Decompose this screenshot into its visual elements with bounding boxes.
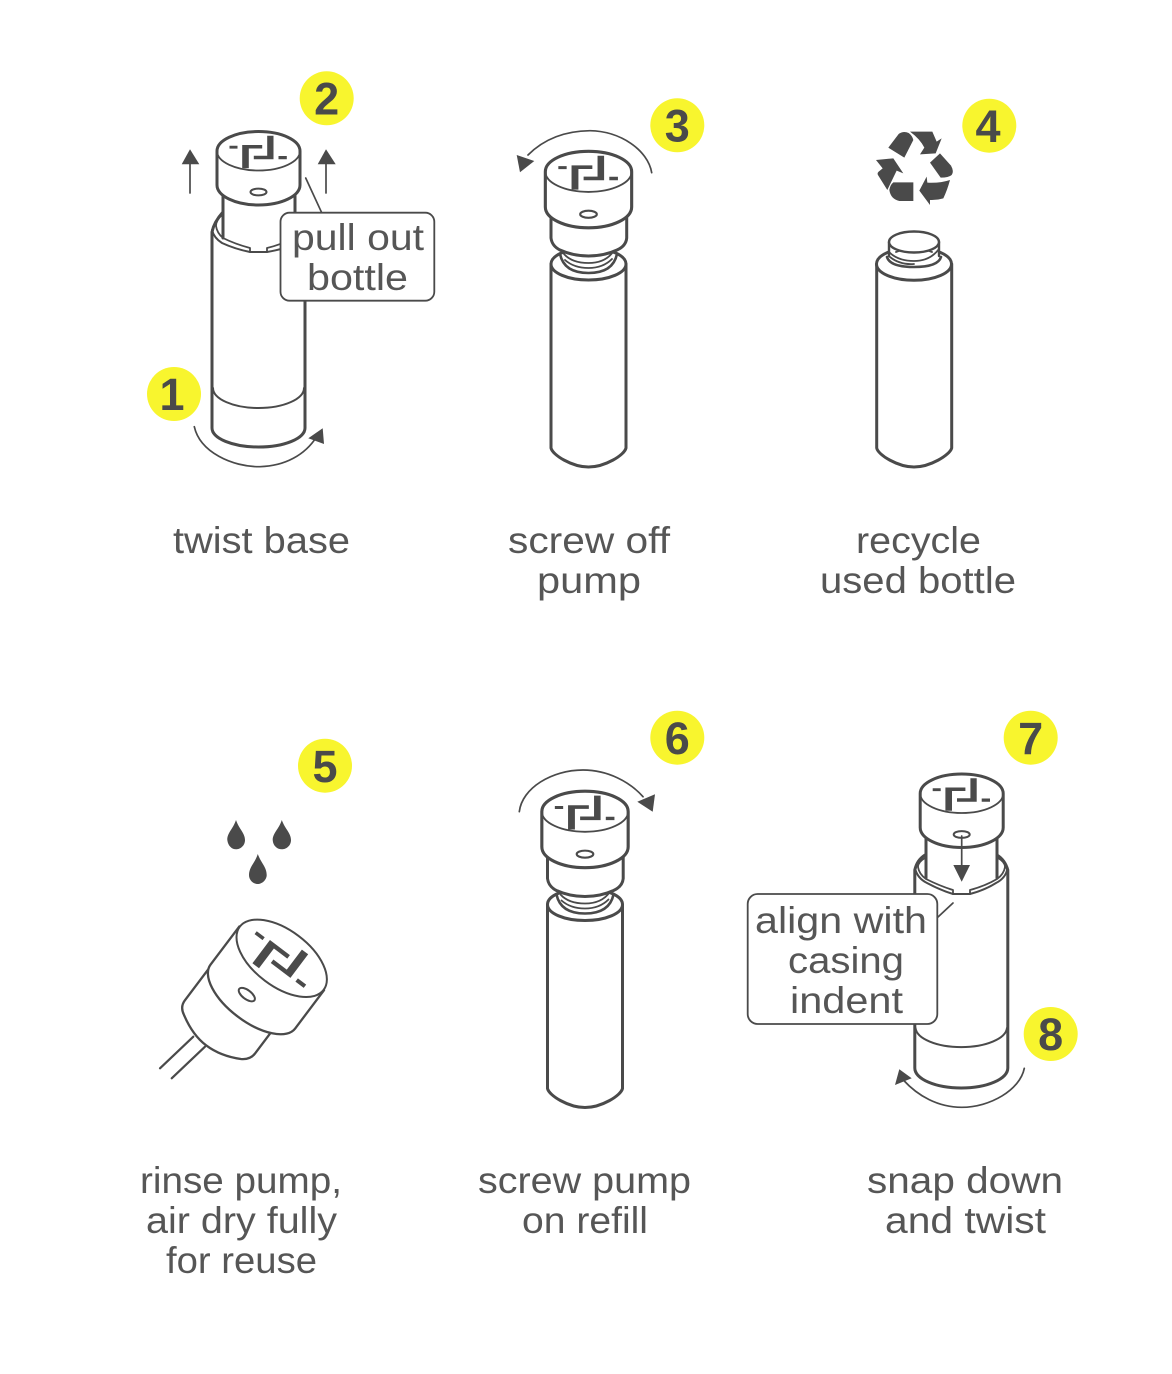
step 5 illustration: tilted pump xyxy=(160,904,341,1082)
caption: snap down and twist: snap down xyxy=(867,1160,1063,1201)
callout: pull out bottle: pull out xyxy=(292,217,425,258)
caption: screw pump on refill: on refill xyxy=(522,1200,648,1241)
icon: water drops xyxy=(227,820,291,884)
callout: align with casing indent: indent xyxy=(790,980,904,1021)
step 3 illustration: bottle with pump xyxy=(545,151,632,467)
step 6 illustration: pump on refill xyxy=(542,791,628,1108)
badge 5 xyxy=(298,739,352,793)
bottle and neck xyxy=(551,215,627,467)
casing body xyxy=(212,212,305,447)
caption: recycle used bottle: recycle xyxy=(856,520,981,561)
pump neck xyxy=(171,959,286,1072)
badge 2 xyxy=(300,71,354,125)
badge 7 xyxy=(1004,711,1058,765)
caption: recycle used bottle: used bottle xyxy=(820,560,1016,601)
arrow: push down xyxy=(961,836,963,868)
pump cap xyxy=(920,774,1003,847)
casing rim with notch xyxy=(216,215,294,252)
arrow: pull up left xyxy=(182,149,199,193)
casing body xyxy=(915,855,1008,1088)
arrow: screw on xyxy=(519,770,655,812)
badge 3 xyxy=(650,98,704,152)
caption: snap down and twist xyxy=(867,1160,1063,1241)
arrow: twist base xyxy=(194,427,324,467)
badge 1: 1 xyxy=(159,369,185,420)
badge 4 xyxy=(962,99,1016,153)
badge 6: 6 xyxy=(665,713,690,764)
badge 4: 4 xyxy=(975,101,1001,152)
casing rim with notch xyxy=(918,858,1005,894)
step 1 and 2 illustration: casing with pump xyxy=(212,132,305,447)
caption: screw off pump: pump xyxy=(537,560,641,601)
caption: screw pump on refill: screw pump xyxy=(478,1160,691,1201)
casing base band xyxy=(213,388,304,408)
caption: screw pump on refill xyxy=(478,1160,691,1241)
pump cap xyxy=(545,151,632,228)
callout: align with casing indent: casing xyxy=(788,940,904,981)
bottle and neck xyxy=(548,856,623,1108)
caption: twist base: twist base xyxy=(173,520,350,561)
badge 7: 7 xyxy=(1018,713,1043,764)
caption: screw off pump: screw off xyxy=(508,520,671,561)
caption: rinse pump xyxy=(140,1160,342,1281)
casing base band xyxy=(916,1028,1007,1047)
badge 5: 5 xyxy=(312,741,338,792)
badge 6 xyxy=(650,711,704,765)
badge 2: 2 xyxy=(314,74,339,124)
callout: align with casing indent xyxy=(748,894,953,1024)
caption: rinse pump: air dry fully xyxy=(146,1200,338,1241)
caption: recycle used bottle xyxy=(820,520,1016,601)
callout: pull out bottle xyxy=(280,178,434,301)
pump tube xyxy=(160,1037,205,1078)
pump neck xyxy=(223,195,295,250)
pump cap xyxy=(195,926,324,1048)
bottle threads and opening xyxy=(889,242,939,267)
badge 8 xyxy=(1024,1007,1078,1061)
pump cap xyxy=(542,791,628,868)
caption: rinse pump: for reuse xyxy=(166,1240,317,1281)
caption: screw off pump xyxy=(508,520,671,601)
callout: align with casing indent: align with xyxy=(755,900,927,941)
arrow: pull up right xyxy=(318,149,336,193)
icon: recycle symbol xyxy=(876,132,953,205)
step 7 and 8 illustration: casing with pump xyxy=(915,774,1008,1088)
badge 1 xyxy=(147,367,201,421)
pump neck xyxy=(926,835,997,892)
caption: snap down and twist: and twist xyxy=(885,1200,1047,1241)
caption: rinse pump: rinse pump, xyxy=(140,1160,342,1201)
callout: pull out bottle: bottle xyxy=(307,257,408,298)
arrow: twist casing xyxy=(895,1068,1024,1107)
badge 3: 3 xyxy=(665,100,690,152)
arrow: unscrew xyxy=(517,131,652,173)
step 4 illustration: empty bottle xyxy=(876,232,952,467)
pump cap xyxy=(217,132,300,205)
badge 8: 8 xyxy=(1038,1009,1063,1060)
